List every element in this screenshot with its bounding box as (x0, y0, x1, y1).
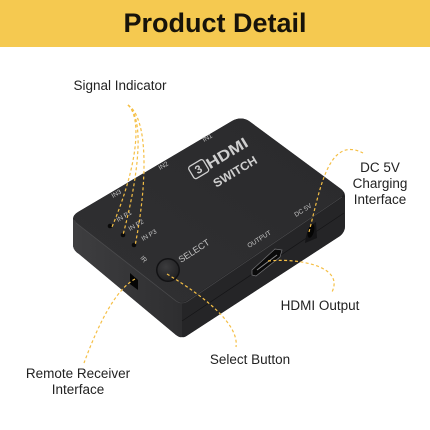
label: DC 5V Charging Interface: Interface (354, 192, 406, 207)
HDMI port (252, 249, 282, 276)
port labels on device: IN1 (202, 132, 214, 144)
header banner (0, 0, 430, 47)
select button (156, 258, 180, 282)
label: HDMI Output: HDMI Output (281, 298, 359, 313)
port labels on device: IN3 (110, 188, 123, 200)
IR window (130, 273, 138, 290)
logo: 3 HDMI SWITCH: HDMI (203, 135, 251, 173)
callout lines (84, 105, 363, 363)
port labels on device: IN2 (158, 160, 170, 172)
logo: 3 HDMI SWITCH (188, 135, 261, 198)
label: Remote Receiver Interface (26, 366, 130, 397)
label: Signal Indicator: Signal Indicator (73, 78, 167, 93)
port labels on device: IN P3 (140, 228, 158, 243)
port labels on device: IN P1 (116, 209, 133, 224)
label: DC 5V Charging Interface: Charging (353, 176, 407, 191)
label: Remote Receiver Interface: Remote Receiver (26, 366, 130, 381)
label: Select Button: Select Button (210, 352, 290, 367)
label: Remote Receiver Interface: Interface (52, 382, 104, 397)
device body (73, 118, 345, 337)
label: DC 5V Charging Interface (353, 160, 407, 207)
port labels on device: OUTPUT (246, 230, 273, 250)
port labels on device: SELECT (177, 237, 212, 265)
port labels on device: IR (138, 255, 148, 264)
label: DC 5V Charging Interface: DC 5V (360, 160, 400, 175)
indicator lights (108, 224, 136, 247)
port labels on device: DC 5V (293, 202, 314, 219)
title: Product Detail (123, 8, 307, 38)
port labels on device (110, 132, 314, 265)
logo: 3 HDMI SWITCH: SWITCH (211, 153, 260, 190)
DC port (305, 222, 317, 243)
port labels on device: IN P2 (128, 218, 145, 233)
logo: 3 HDMI SWITCH: 3 (193, 163, 205, 177)
